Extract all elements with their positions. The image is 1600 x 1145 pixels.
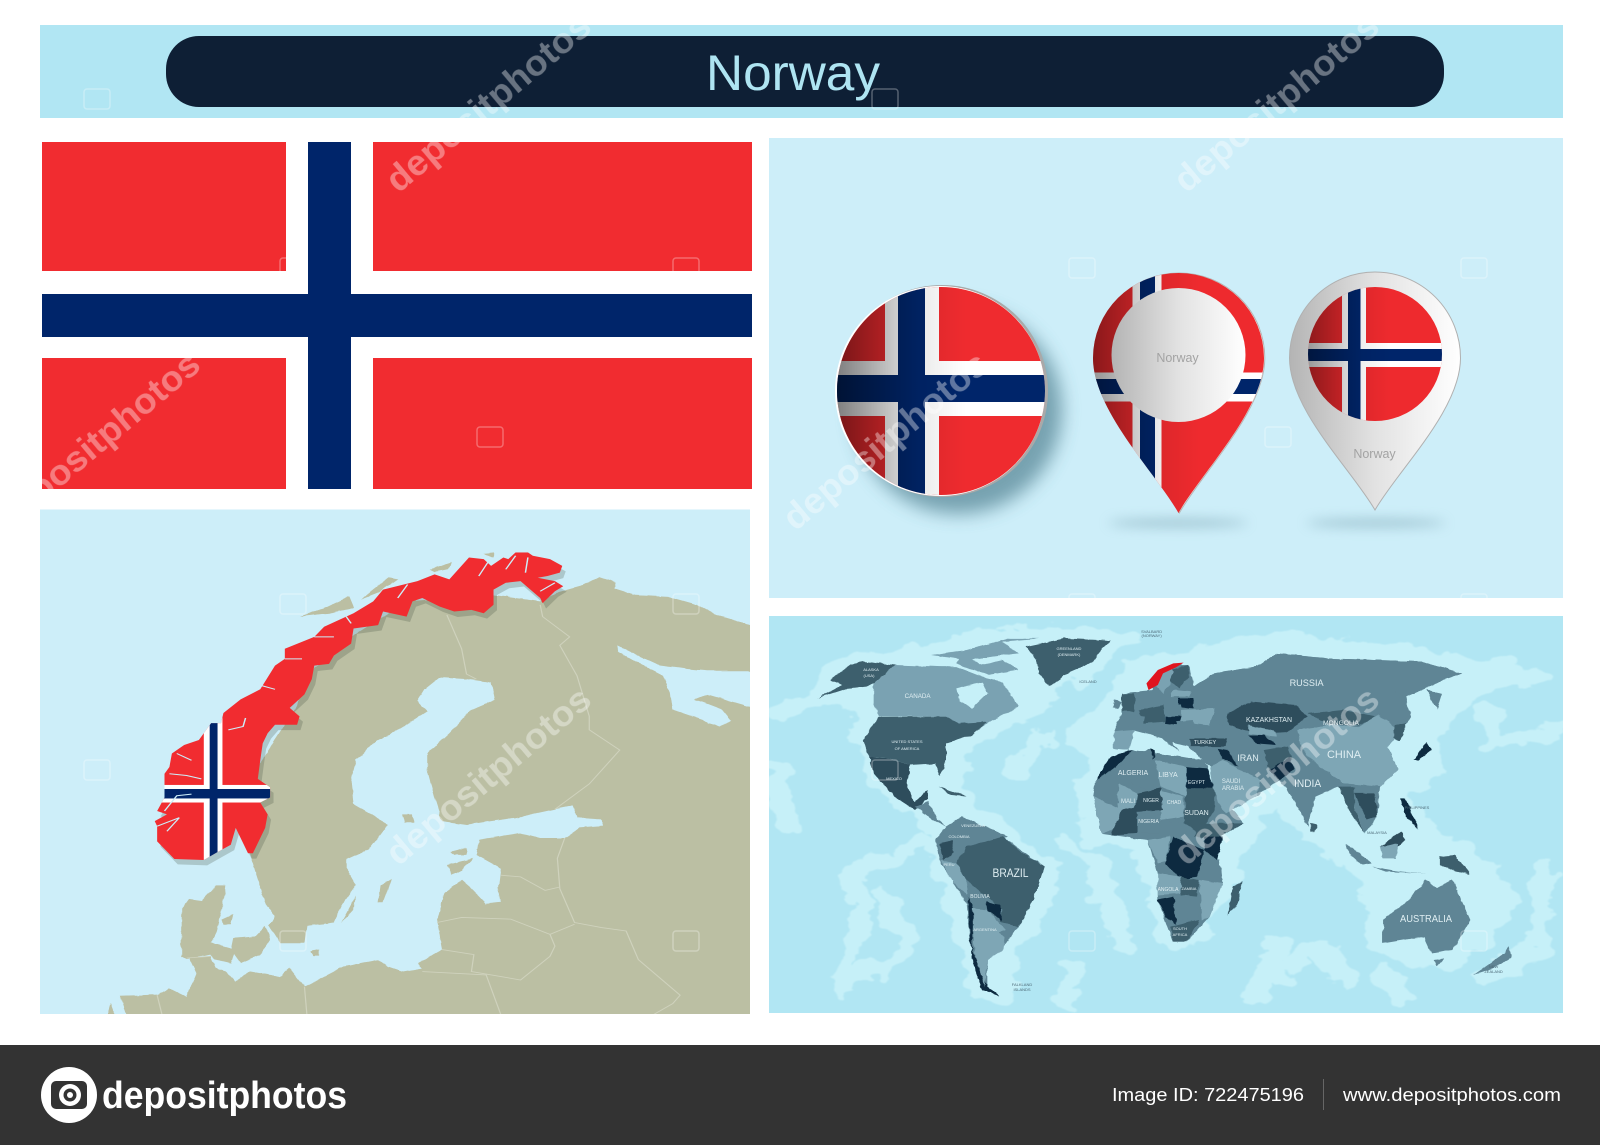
logo: depositphotos	[102, 1075, 347, 1117]
fjords	[157, 556, 555, 831]
title text: Norway	[706, 45, 880, 101]
footer bar	[0, 1045, 1600, 1145]
world map labels: ZEALAND	[1484, 969, 1503, 974]
title band	[40, 25, 1563, 118]
South America	[941, 817, 1044, 997]
icon: flag pin with Norway label: Norway	[1156, 351, 1199, 365]
pale ocean currents	[775, 633, 1566, 1000]
world map labels: SOUTH	[1173, 926, 1187, 931]
world map labels: SAUDI	[1222, 779, 1240, 785]
panel: pins and badge	[769, 138, 1563, 598]
world map labels: AFRICA	[1173, 932, 1188, 937]
world map labels: (NORWAY)	[1142, 633, 1162, 638]
world map labels	[863, 629, 1503, 992]
watermarks: depositphotos	[377, 5, 599, 200]
world map labels: FALKLAND	[1012, 982, 1032, 987]
world map labels: MONGOLIA	[1323, 720, 1360, 727]
Australia and New Zealand	[1383, 880, 1512, 975]
website: www.depositphotos.com	[1342, 1085, 1561, 1105]
world map labels: PHILIPPINES	[1405, 805, 1430, 810]
title pill	[166, 36, 1444, 107]
world map labels: SUDAN	[1184, 810, 1209, 817]
world map labels: AUSTRALIA	[1400, 914, 1452, 925]
icon: silver pin with flag circle: Norway	[1353, 447, 1396, 461]
world map labels: ALASKA	[863, 667, 879, 672]
panel: world map	[769, 616, 1566, 1013]
world map labels: OF AMERICA	[895, 746, 920, 751]
world map labels: ARGENTINA	[973, 927, 997, 932]
Norway highlighted in red	[1146, 663, 1184, 690]
watermarks: depositphotos	[377, 678, 599, 873]
base silhouettes	[936, 653, 1463, 997]
world map labels: ZAMBIA	[1182, 886, 1197, 891]
world map labels: SVALBARD	[1141, 629, 1162, 634]
logo	[41, 1067, 347, 1123]
North America	[817, 638, 1111, 827]
world map labels: CANADA	[905, 694, 931, 700]
world map labels: UNITED STATES	[892, 739, 923, 744]
icon: circular flag badge	[830, 280, 1062, 514]
flag of Norway	[42, 142, 752, 489]
world map labels: TURKEY	[1194, 740, 1216, 746]
world map labels: GREENLAND	[1057, 646, 1082, 651]
world map labels: RUSSIA	[1290, 678, 1324, 688]
world map labels: ARABIA	[1222, 786, 1244, 792]
world map labels: ANGOLA	[1158, 887, 1179, 893]
world map labels: CHINA	[1327, 749, 1362, 761]
world map labels: (USA)	[864, 673, 875, 678]
world map labels: EGYPT	[1188, 780, 1205, 786]
image id: Image ID: 722475196	[1112, 1085, 1304, 1105]
world map labels: ICELAND	[1079, 679, 1097, 684]
watermarks: depositphotos	[774, 343, 996, 538]
Africa	[1093, 748, 1243, 942]
Norway shadow	[158, 558, 567, 865]
panel: regional map of Norway	[40, 510, 766, 1021]
icon: silver pin with flag circle	[1290, 272, 1460, 527]
world map labels: ISLANDS	[1013, 987, 1031, 992]
world map labels: NIGERIA	[1138, 819, 1159, 825]
White Sea	[618, 645, 766, 726]
world map labels: MEXICO	[886, 776, 902, 781]
land mass of northern Europe	[106, 552, 766, 1021]
continents	[817, 638, 1512, 997]
Norway in flag colours	[147, 547, 570, 865]
Eurasia	[1112, 653, 1470, 875]
world map labels: LIBYA	[1158, 772, 1178, 779]
world map labels: MALAYSIA	[1367, 830, 1387, 835]
watermarks: depositphotos	[1165, 5, 1387, 200]
icon: flag pin with Norway label	[1090, 270, 1270, 527]
world map labels: NEW	[1489, 964, 1498, 969]
world map labels: BOLIVIA	[970, 894, 990, 900]
world map labels: INDIA	[1294, 778, 1322, 790]
world map labels: MALI	[1121, 799, 1135, 805]
world map labels: NIGER	[1143, 798, 1159, 804]
world map labels: IRAN	[1237, 753, 1259, 763]
Denmark and southern islands	[106, 552, 495, 1021]
world map labels: COLOMBIA	[948, 834, 970, 839]
watermarks	[0, 5, 1387, 873]
world map labels: VENEZUELA	[961, 823, 985, 828]
world map labels: PERU	[943, 862, 955, 867]
country borders	[157, 605, 680, 1015]
world map labels: (DENMARK)	[1058, 652, 1081, 657]
world map labels: KAZAKHSTAN	[1246, 715, 1292, 724]
watermark camera marks	[84, 89, 1487, 951]
world map labels: CHAD	[1167, 800, 1181, 806]
watermarks: depositphotos	[1165, 678, 1387, 873]
world map labels: ALGERIA	[1118, 770, 1148, 777]
world map labels: BRAZIL	[992, 866, 1029, 880]
